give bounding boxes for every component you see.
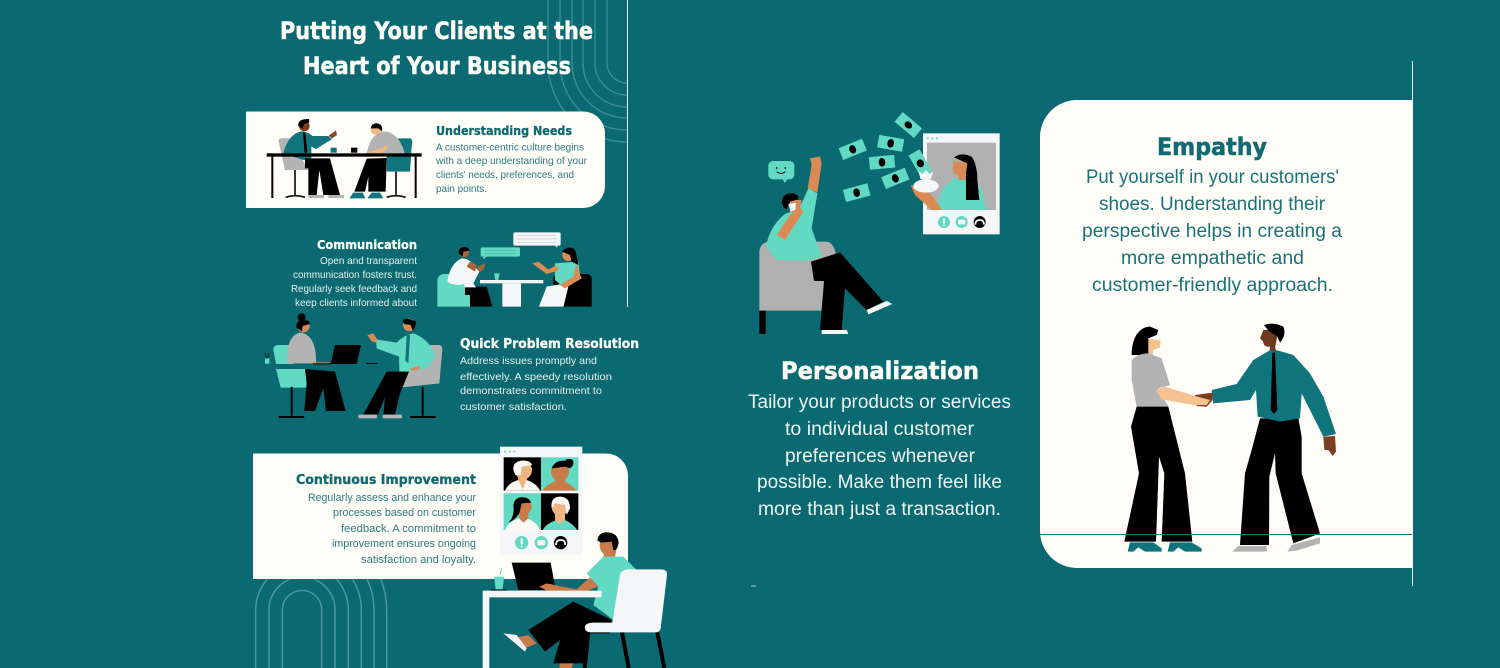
text: personalization body: possible. Make them feel like [757, 472, 1002, 493]
decorative arches: bottom left [254, 579, 388, 668]
text: communication body [291, 256, 417, 309]
text: quick problem resolution body: Address issues promptly and [460, 355, 597, 367]
text: quick problem resolution body: customer satisfaction. [460, 401, 567, 413]
illustration: two people at a desk [267, 119, 422, 198]
panel: empathy [1040, 100, 1413, 568]
text: personalization body: to individual customer [785, 419, 975, 440]
text: continuous improvement body: Regularly assess and enhance your [308, 492, 476, 504]
title: Heart of Your Business [303, 52, 571, 80]
text: personalization body: more than just a transaction. [758, 499, 1001, 520]
heading: quick problem resolution: Quick Problem Resolution [460, 337, 639, 352]
text: empathy body: Put yourself in your customers' [1086, 167, 1339, 188]
illustration: personalization customer and money [759, 112, 1000, 334]
text: empathy body [1082, 167, 1342, 296]
heading: communication: Communication [317, 237, 417, 252]
illustration: video call window [500, 447, 582, 555]
text: understanding needs body: with a deep understanding of your [435, 156, 588, 167]
section: quick problem resolution [265, 313, 639, 418]
text: continuous improvement body: satisfaction and loyalty. [361, 554, 476, 566]
text: quick problem resolution body: demonstrates commitment to [460, 385, 602, 397]
text: understanding needs body: pain points. [436, 184, 487, 195]
illustration: handshake [1124, 324, 1336, 552]
icon: man in armchair [759, 157, 892, 334]
heading: personalization: Personalization [781, 357, 979, 385]
text: understanding needs body: A customer-centric culture begins [436, 142, 584, 154]
text: empathy body: shoes. Understanding their [1099, 194, 1326, 215]
panel: understanding needs [246, 112, 605, 208]
icon: flying bills [839, 112, 922, 202]
text: communication body: Regularly seek feedback and [291, 284, 417, 295]
text: communication body: keep clients informed about [295, 298, 417, 309]
text: understanding needs body: clients' needs, preferences, and [436, 170, 574, 181]
text: personalization body [748, 392, 1011, 520]
text: personalization body: preferences whenever [785, 446, 976, 467]
title [280, 17, 593, 80]
title: Putting Your Clients at the [280, 17, 593, 45]
section: communication [291, 232, 592, 310]
text: empathy body: perspective helps in creating a [1082, 221, 1342, 242]
text: personalization body: Tailor your products or services [748, 392, 1011, 413]
text: continuous improvement body: improvement ensures ongoing [332, 538, 476, 550]
icon: video window with woman [909, 133, 1000, 234]
heading: understanding needs: Understanding Needs [436, 123, 572, 138]
text: quick problem resolution body: effectively. A speedy resolution [460, 371, 612, 383]
text: quick problem resolution body [460, 355, 612, 413]
text: empathy body: more empathetic and [1121, 248, 1304, 269]
text: communication body: communication fosters trust. [293, 270, 417, 281]
panel: continuous improvement [253, 447, 628, 579]
text: continuous improvement body: processes based on customer [333, 507, 476, 519]
illustration: two people at a laptop [265, 313, 442, 418]
heading: empathy: Empathy [1157, 133, 1267, 161]
decorative arcs: top right [548, 0, 627, 142]
text: continuous improvement body: feedback. A commitment to [341, 523, 476, 535]
illustration: person working on laptop [483, 532, 667, 668]
heading: continuous improvement: Continuous Improvement [296, 473, 476, 488]
text: understanding needs body [435, 142, 588, 195]
text: continuous improvement body [308, 492, 476, 566]
icon: smiley speech bubble [768, 161, 794, 183]
illustration: two people talking at a table [437, 232, 592, 310]
text: empathy body: customer-friendly approach. [1092, 275, 1333, 296]
text: communication body: Open and transparent [320, 256, 417, 267]
